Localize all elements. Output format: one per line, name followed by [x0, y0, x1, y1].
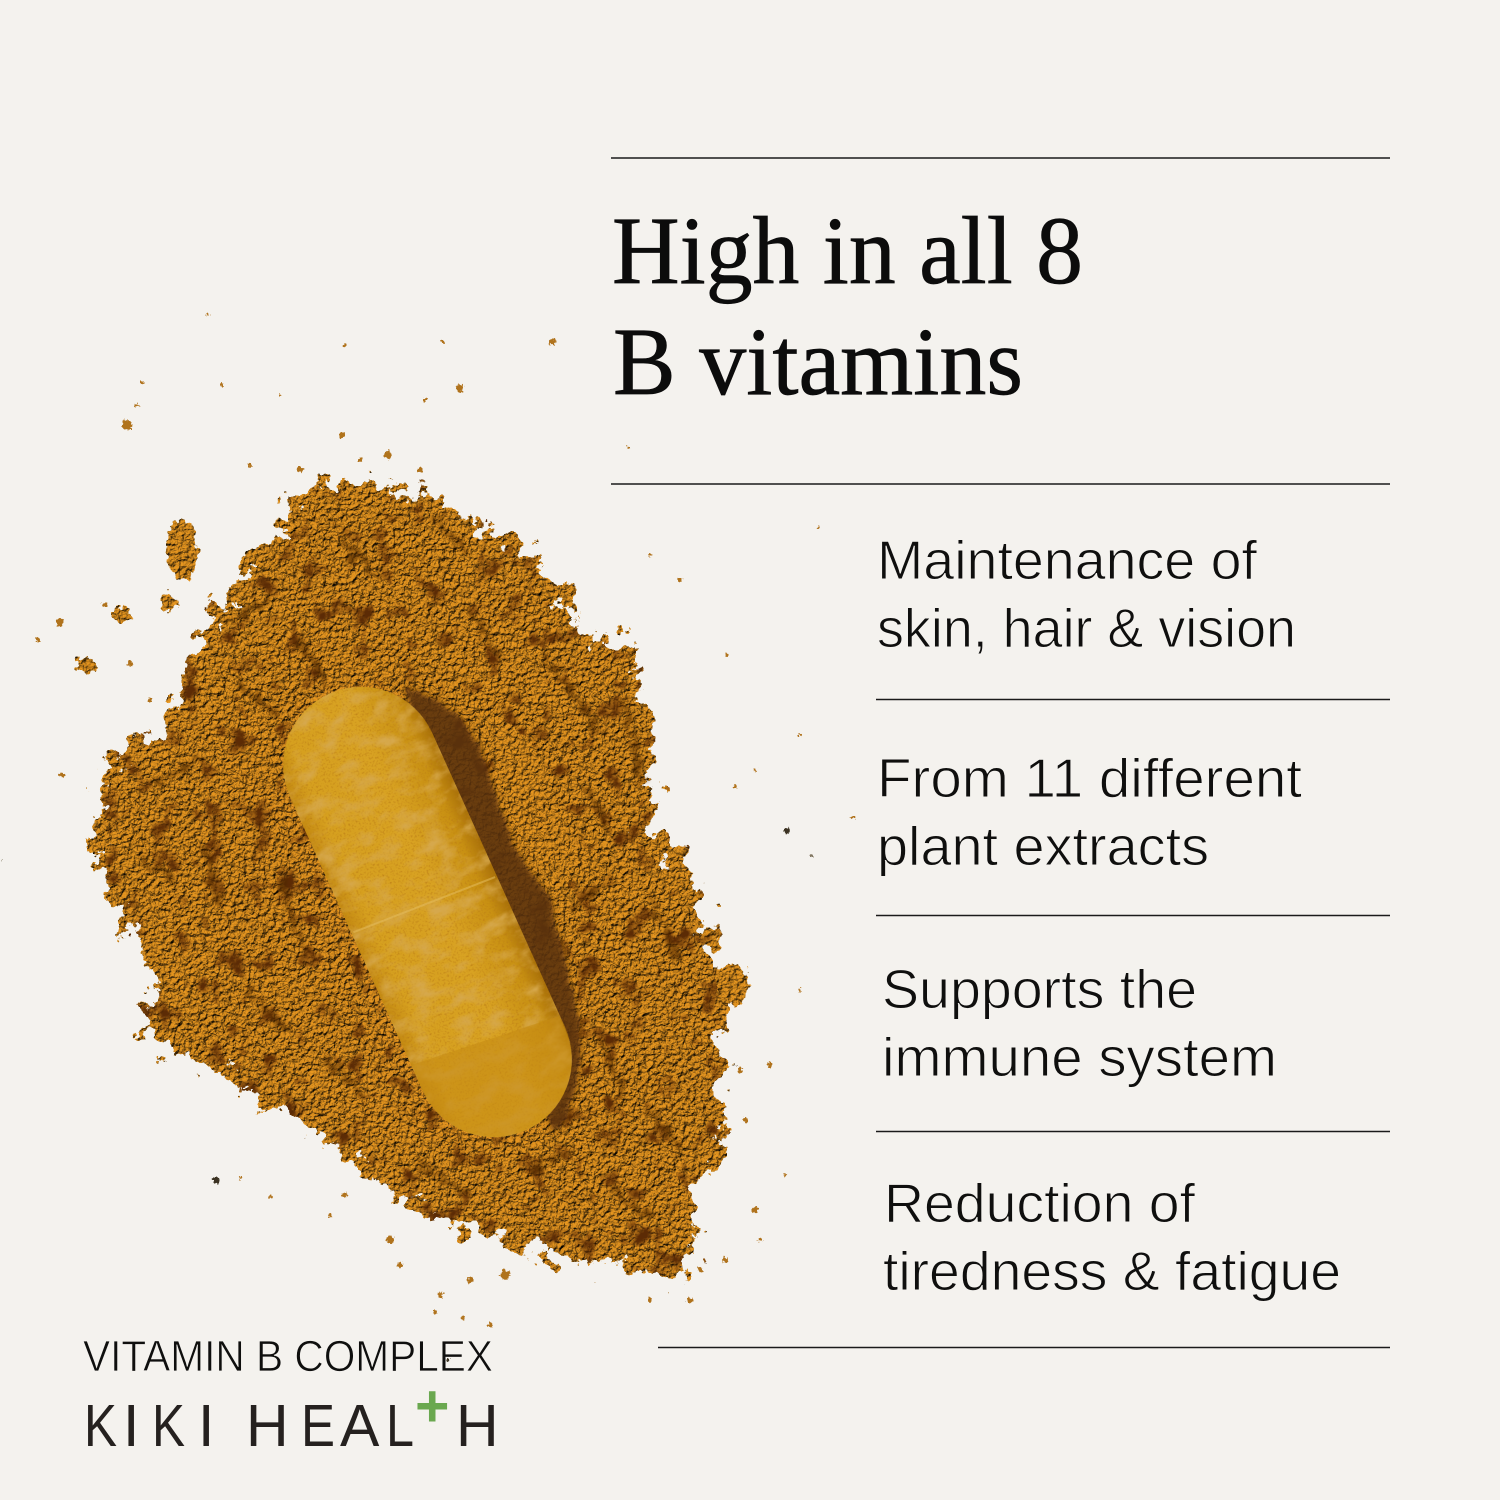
benefit: immune system [882, 958, 1277, 1088]
logo plus sign: + [415, 1373, 449, 1439]
heading [612, 197, 1083, 415]
product name: VITAMIN B COMPLEX [83, 1332, 493, 1381]
brand logo: I [198, 1393, 214, 1459]
benefit: immune system: immune system [882, 1026, 1277, 1088]
powder lobe beside capsule [488, 718, 569, 898]
powder crevices [140, 520, 680, 1215]
brand logo: L [386, 1393, 414, 1459]
benefit: skin, hair and vision: Maintenance of [877, 529, 1258, 591]
brand logo: K [84, 1393, 117, 1459]
powder pile with capsule [74, 480, 749, 1285]
brand logo: A [340, 1393, 380, 1459]
benefit: plant extracts [877, 747, 1302, 877]
benefit: plant extracts: plant extracts [877, 815, 1209, 877]
benefit: tiredness and fatigue [883, 1172, 1341, 1302]
capsule [258, 662, 597, 1162]
brand logo: K [152, 1393, 185, 1459]
heading: High in all 8 [612, 197, 1083, 304]
benefit: skin, hair and vision [877, 529, 1296, 659]
brand logo: E [301, 1393, 335, 1459]
brand logo: I [123, 1393, 139, 1459]
heading: B vitamins [613, 308, 1023, 415]
capsule end band [412, 1002, 596, 1162]
capsule seam [353, 870, 495, 940]
capsule shadow [405, 687, 580, 1132]
benefit: tiredness and fatigue: Reduction of [884, 1172, 1196, 1234]
brand logo [84, 1373, 499, 1459]
benefit: plant extracts: From 11 different [877, 747, 1302, 809]
benefit: immune system: Supports the [882, 958, 1197, 1020]
brand logo: H [456, 1393, 499, 1459]
benefit: tiredness and fatigue: tiredness & fatigue [883, 1240, 1341, 1302]
powder mound [92, 480, 738, 1285]
scattered powder particles [1, 312, 855, 1362]
brand logo: H [246, 1393, 289, 1459]
divider lines [611, 158, 1390, 1348]
loose powder clumps [74, 520, 749, 1005]
benefit: skin, hair and vision: skin, hair & vision [877, 597, 1296, 659]
capsule body [258, 662, 597, 1162]
